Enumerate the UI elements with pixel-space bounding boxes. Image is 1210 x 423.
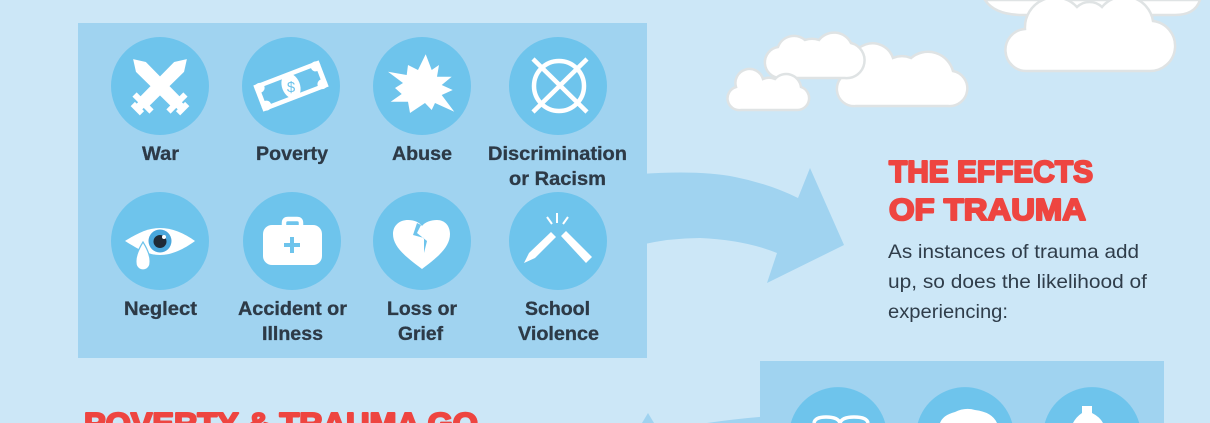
label: accident or illness: Illness <box>262 324 323 345</box>
icon: school violence <box>509 192 607 290</box>
arrow: effects to poverty <box>642 413 765 423</box>
icon: second effect <box>918 387 1012 423</box>
heading: the effects of trauma: OF TRAUMA <box>889 192 1086 227</box>
arrow: causes to effects <box>640 168 844 283</box>
label: accident or illness: Accident or <box>238 299 348 320</box>
label: loss or grief: Loss or <box>387 299 458 320</box>
icon: poverty <box>242 37 340 135</box>
label: discrimination or racism: or Racism <box>509 169 606 190</box>
icon: accident or illness <box>243 192 341 290</box>
icon: poverty: $ <box>287 79 296 96</box>
label: neglect: Neglect <box>124 299 198 320</box>
label: abuse: Abuse <box>392 144 452 165</box>
text block: effects intro: up, so does the likelihood of <box>888 271 1148 293</box>
icon: war <box>111 37 209 135</box>
cloud group: top right <box>985 0 1200 71</box>
label: accident or illness <box>238 299 348 345</box>
label: school violence <box>518 299 599 345</box>
cloud group: centre <box>728 33 967 110</box>
heading: the effects of trauma <box>889 154 1093 227</box>
icon: neglect <box>111 192 209 290</box>
label: discrimination or racism <box>488 144 627 190</box>
label: school violence: Violence <box>518 324 599 345</box>
panel: effects of trauma <box>760 361 1164 423</box>
text block: effects intro: experiencing: <box>888 301 1008 323</box>
panel: causes of trauma <box>78 23 647 358</box>
label: discrimination or racism: Discrimination <box>488 144 627 165</box>
heading: the effects of trauma: THE EFFECTS <box>889 154 1093 189</box>
label: poverty: Poverty <box>256 144 328 165</box>
icon: first effect <box>791 387 885 423</box>
icon: discrimination <box>509 37 607 135</box>
label: school violence: School <box>525 299 590 320</box>
icon: abuse <box>373 37 471 135</box>
text block: effects intro <box>888 241 1148 323</box>
icon: third effect <box>1045 387 1139 423</box>
text block: effects intro: As instances of trauma add <box>888 241 1139 263</box>
label: war: War <box>142 144 180 165</box>
label: loss or grief: Grief <box>398 324 444 345</box>
label: loss or grief <box>387 299 458 345</box>
icon: loss or grief <box>373 192 471 290</box>
